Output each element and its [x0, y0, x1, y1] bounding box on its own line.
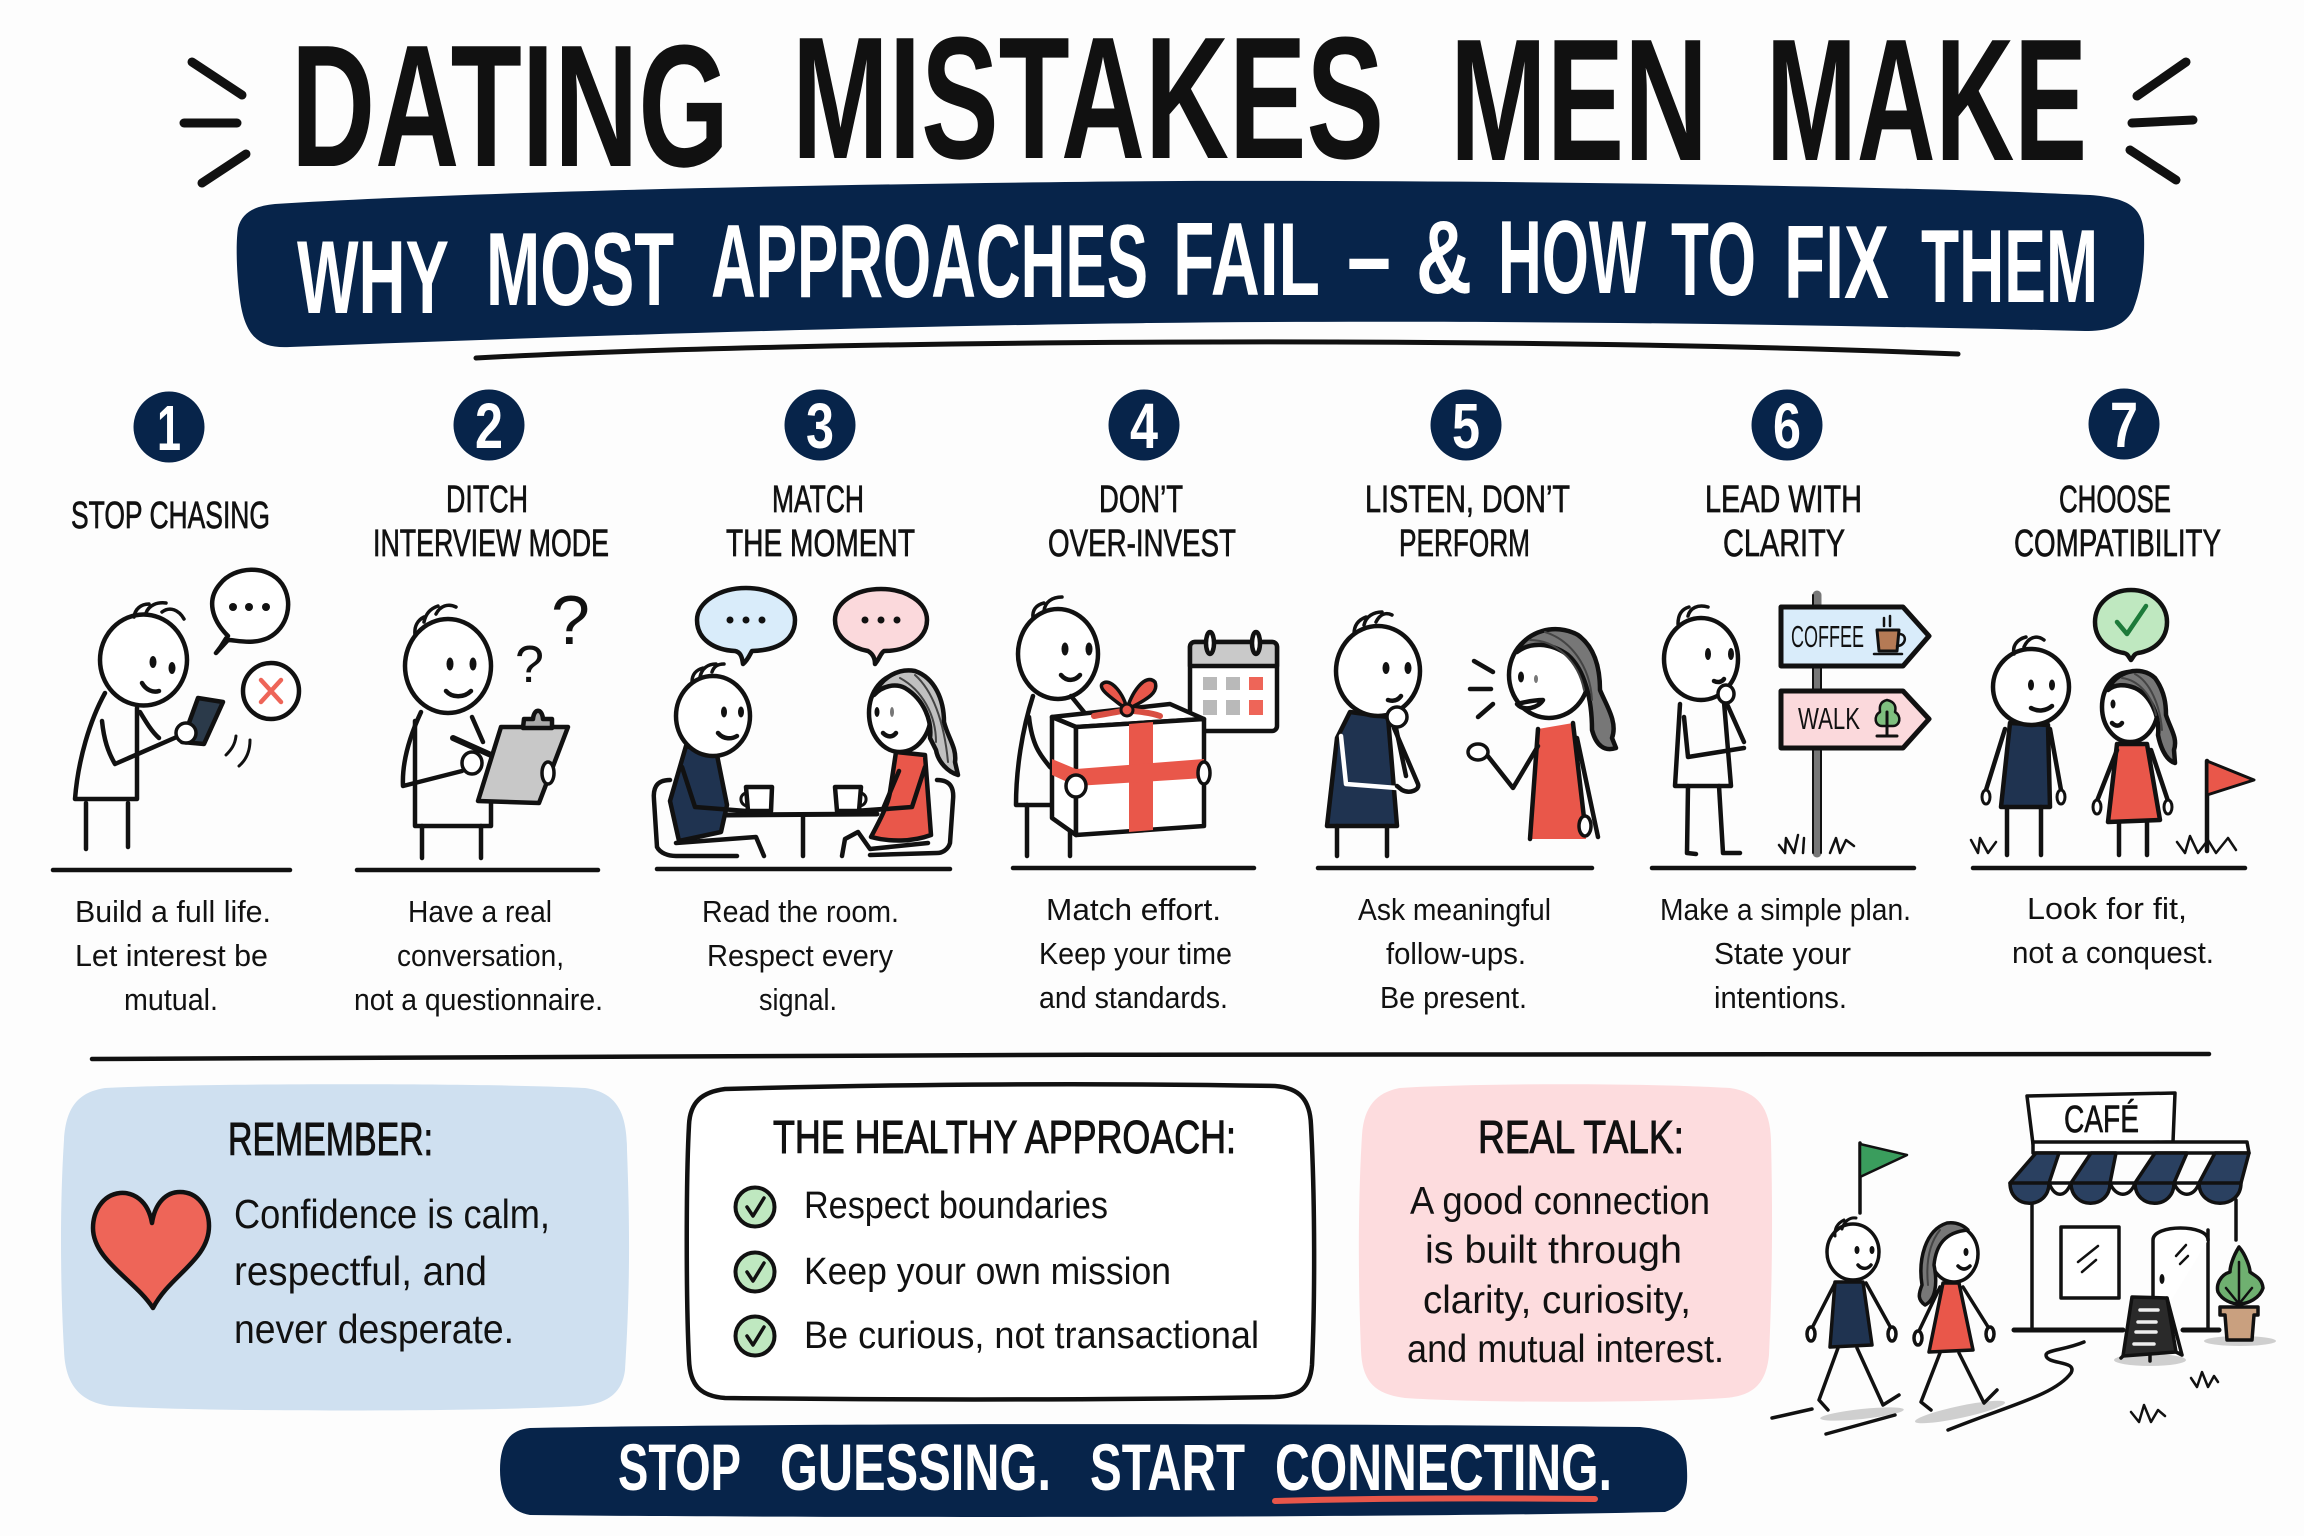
remember text: Confidence is calm,: [234, 1191, 550, 1237]
healthy heading: THE HEALTHY APPROACH:: [773, 1111, 1236, 1163]
red underline: [1275, 1498, 1595, 1501]
calendar: [1190, 632, 1277, 731]
description 5: follow-ups.: [1386, 936, 1526, 971]
description 7: [2012, 891, 2214, 970]
footer banner: START: [1090, 1430, 1245, 1504]
heading 5: [1365, 479, 1570, 565]
heading 3: [726, 479, 915, 565]
heading 2: [373, 479, 609, 565]
number badge 5: [1430, 390, 1502, 462]
number badge 3: 3: [806, 390, 834, 462]
description 3: Respect every: [707, 938, 893, 973]
item 2: Keep your own mission: [804, 1251, 1171, 1293]
subtitle banner: TO: [1671, 202, 1756, 318]
number badge 3: [784, 390, 856, 462]
heading 6: LEAD WITH: [1705, 479, 1862, 521]
illustration 2: ?: [551, 581, 590, 659]
footer banner: CONNECTING.: [1275, 1430, 1612, 1504]
illustration 4: [1016, 597, 1277, 856]
description 2: [354, 894, 603, 1017]
subtitle banner: WHY: [297, 220, 449, 336]
number badge 7: [2088, 388, 2160, 461]
sign: walk: WALK: [1798, 701, 1860, 736]
heading 7: [2014, 479, 2221, 565]
description 2: conversation,: [397, 938, 564, 973]
heading 6: CLARITY: [1723, 523, 1845, 565]
step 3: match the moment: [654, 390, 958, 1017]
remember text: respectful, and: [234, 1248, 487, 1294]
title: MISTAKES: [792, 0, 1384, 195]
awning: [2010, 1153, 2249, 1203]
description 6: State your: [1714, 936, 1851, 971]
title underline: [476, 342, 1958, 358]
description 3: signal.: [759, 982, 837, 1017]
description 6: Make a simple plan.: [1660, 892, 1911, 927]
title: DATING: [291, 8, 729, 203]
real talk text: clarity, curiosity,: [1423, 1279, 1691, 1322]
description 7: Look for fit,: [2027, 891, 2187, 926]
illustration 5: [1327, 612, 1616, 856]
ground line 7: [1973, 866, 2245, 870]
description 5: Be present.: [1380, 980, 1527, 1015]
subtitle banner: HOW: [1498, 200, 1646, 316]
heading 1: STOP CHASING: [71, 495, 270, 537]
sign: coffee: [1781, 607, 1929, 666]
illustration 3: [654, 588, 958, 856]
subtitle banner: THEM: [1921, 209, 2098, 325]
number badge 7: 7: [2110, 389, 2138, 461]
man walking: [1807, 1218, 1899, 1410]
illustration 7: [1971, 590, 2254, 855]
illustration 6: [1664, 595, 1929, 854]
description 4: Keep your time: [1039, 936, 1232, 971]
ground line 1: [53, 868, 290, 872]
panel: real talk: [1359, 1084, 1772, 1402]
description 3: Read the room.: [702, 894, 899, 929]
grass: [2131, 1372, 2218, 1422]
heading 3: MATCH: [772, 479, 864, 521]
description 1: Let interest be: [75, 938, 268, 973]
description 2: Have a real: [408, 894, 552, 929]
icon: left burst lines: [184, 62, 246, 183]
panel: the healthy approach: [687, 1084, 1314, 1399]
heading 7: CHOOSE: [2059, 479, 2171, 521]
sign: coffee: COFFEE: [1791, 619, 1864, 654]
description 6: [1660, 892, 1911, 1015]
cafe building: [2010, 1093, 2249, 1330]
step 2: ditch interview mode: [354, 390, 609, 1017]
number badge 6: 6: [1773, 390, 1801, 462]
woman walking: [1914, 1223, 1997, 1410]
remember text: [234, 1191, 550, 1352]
description 1: [75, 894, 271, 1017]
ground line 4: [1013, 866, 1254, 870]
subtitle banner: MOST: [486, 212, 674, 328]
subtitle banner: &: [1416, 200, 1472, 316]
number badge 4: [1108, 390, 1180, 462]
shadows: [1820, 1336, 2276, 1427]
a-board sign: [2121, 1297, 2182, 1361]
ground line 2: [357, 868, 598, 872]
grass: [1779, 835, 1854, 853]
heading 4: [1048, 479, 1236, 565]
heading 5: LISTEN, DON’T: [1365, 479, 1570, 521]
number badge 4: 4: [1130, 390, 1158, 462]
step 4: don't over-invest: [1013, 390, 1277, 1015]
description 1: mutual.: [124, 982, 218, 1017]
heading 4: OVER-INVEST: [1048, 523, 1236, 565]
item 1: Respect boundaries: [804, 1185, 1108, 1227]
subtitle banner: APPROACHES: [711, 204, 1148, 320]
step 7: choose compatibility: [1971, 388, 2254, 970]
description 4: [1039, 892, 1232, 1015]
subtitle banner: FAIL: [1173, 202, 1320, 318]
step 6: lead with clarity: [1652, 390, 1929, 1015]
heading 5: PERFORM: [1399, 523, 1530, 565]
ground line 5: [1318, 866, 1592, 870]
real talk heading: REAL TALK:: [1478, 1111, 1684, 1163]
step 5: listen, don't perform: [1318, 390, 1616, 1015]
step 1: stop chasing: [53, 392, 299, 1017]
footer banner: STOP: [618, 1430, 741, 1504]
title: MEN: [1450, 2, 1708, 197]
panel: remember: [61, 1084, 629, 1410]
real talk text: is built through: [1425, 1229, 1682, 1272]
footer banner: GUESSING.: [780, 1430, 1051, 1504]
description 5: [1358, 892, 1551, 1015]
remember text: never desperate.: [234, 1306, 514, 1352]
title: MAKE: [1766, 2, 2087, 197]
real talk text: A good connection: [1410, 1180, 1710, 1223]
subtitle banner: FIX: [1784, 205, 1889, 321]
description 5: Ask meaningful: [1358, 892, 1551, 927]
heading 2: DITCH: [446, 479, 528, 521]
green flag: [1860, 1143, 1907, 1213]
number badge 1: [134, 392, 204, 464]
cafe building: CAFÉ: [2064, 1098, 2139, 1141]
description 4: and standards.: [1039, 980, 1228, 1015]
footer banner: [500, 1424, 1687, 1517]
real talk text: [1407, 1180, 1724, 1371]
illustration 1: [75, 570, 299, 849]
description 6: intentions.: [1714, 980, 1847, 1015]
number badge 1: 1: [157, 392, 181, 464]
real talk text: and mutual interest.: [1407, 1328, 1724, 1371]
item 3: Be curious, not transactional: [804, 1315, 1259, 1357]
description 1: Build a full life.: [75, 894, 271, 929]
number badge 6: [1752, 390, 1822, 462]
ground line 3: [657, 867, 950, 871]
description 4: Match effort.: [1046, 892, 1221, 927]
heading 3: THE MOMENT: [726, 523, 915, 565]
heading 6: [1705, 479, 1862, 565]
subtitle banner: –: [1347, 199, 1391, 315]
description 2: not a questionnaire.: [354, 982, 603, 1017]
subtitle banner: [237, 181, 2144, 347]
gift box: [1052, 680, 1204, 835]
icon: right burst lines: [2130, 62, 2193, 180]
heading 2: INTERVIEW MODE: [373, 523, 609, 565]
remember heading: REMEMBER:: [228, 1113, 433, 1165]
title: [291, 0, 2087, 203]
illustration: couple walking to cafe: [1772, 1093, 2276, 1434]
path lines: [1772, 1342, 2084, 1434]
number badge 2: [454, 390, 524, 462]
icon: heart: [93, 1192, 209, 1308]
ground line 6: [1652, 866, 1914, 870]
description 3: [702, 894, 899, 1017]
number badge 5: 5: [1452, 390, 1480, 462]
illustration 2: ?: [515, 636, 544, 694]
sign: walk: [1781, 691, 1929, 748]
description 7: not a conquest.: [2012, 935, 2214, 970]
heading 4: DON’T: [1099, 479, 1183, 521]
illustration 2: [403, 581, 590, 858]
heading 7: COMPATIBILITY: [2014, 523, 2221, 565]
potted plant: [2218, 1247, 2263, 1340]
number badge 2: 2: [475, 390, 503, 462]
checklist: [736, 1185, 1259, 1357]
